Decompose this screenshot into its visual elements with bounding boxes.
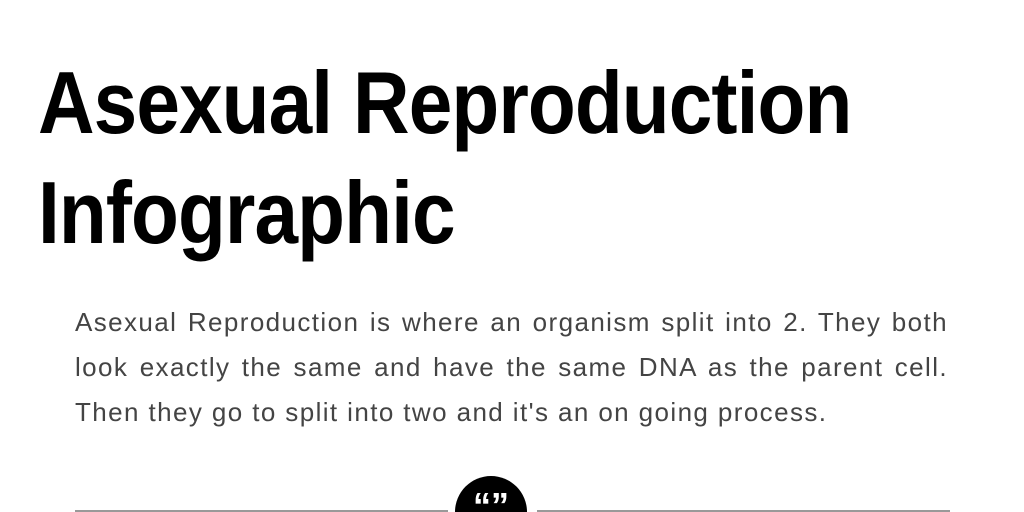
- title: [38, 53, 851, 262]
- icon: quote: [455, 476, 527, 512]
- title: Asexual Reproduction: [38, 53, 851, 152]
- text block: description: Then they go to split into two and it's an on going process.: [75, 397, 827, 427]
- text block: description: Asexual Reproduction is where an organism split into 2. They both: [75, 307, 948, 337]
- text block: description: look exactly the same and have the same DNA as the parent cell.: [75, 352, 948, 382]
- title: Infographic: [38, 163, 455, 262]
- text block: description: [75, 307, 948, 427]
